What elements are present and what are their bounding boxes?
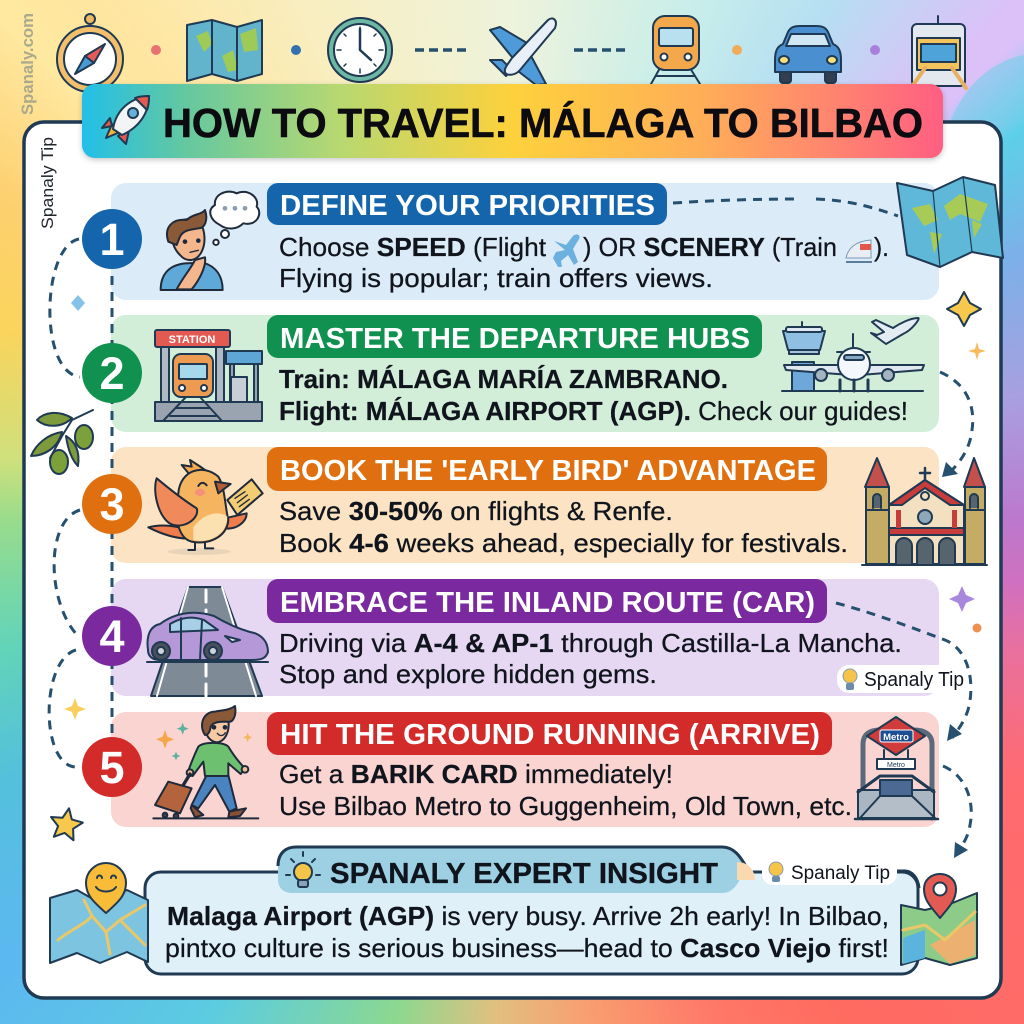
pill heading 4 xyxy=(267,579,827,623)
icon: platform xyxy=(911,16,966,88)
decoration: gold sparkle xyxy=(64,698,86,720)
body text 5: Use Bilbao Metro to Guggenheim, Old Town, etc. xyxy=(279,791,852,821)
icon: station: STATION xyxy=(169,334,215,346)
decoration: diamond sparkle xyxy=(71,295,85,311)
tab outline xyxy=(278,847,747,868)
connector lines near tip xyxy=(755,871,919,888)
icon: walking traveller xyxy=(153,706,258,818)
step 3 panel xyxy=(111,447,987,565)
background blob xyxy=(950,55,1024,122)
body text 3: Save 30-50% on flights & Renfe. xyxy=(279,496,673,526)
tip badge in insight xyxy=(762,860,897,885)
watermark: Spanaly.com: Spanaly.com xyxy=(18,13,37,115)
peach blob connector xyxy=(737,862,755,880)
step number circles xyxy=(82,209,142,797)
pill heading 5 xyxy=(267,712,832,755)
icon: world map xyxy=(187,20,262,81)
icon: station xyxy=(155,330,262,421)
icon: airplane xyxy=(490,18,556,85)
pill heading 2 xyxy=(267,315,762,358)
decoration: gold star sparkle xyxy=(947,292,981,326)
decoration: small orange sparkle xyxy=(968,342,986,360)
top icon strip xyxy=(57,14,966,92)
icon: rocket xyxy=(102,96,149,144)
title text: HOW TO TRAVEL: MÁLAGA TO BILBAO xyxy=(163,100,923,146)
arrowhead into insight xyxy=(954,842,968,858)
icon: car xyxy=(775,26,841,83)
pill heading 2: MASTER THE DEPARTURE HUBS xyxy=(280,323,750,355)
number 4: 4 xyxy=(99,611,125,662)
title banner xyxy=(82,84,943,158)
insight text xyxy=(165,901,889,963)
number 3: 3 xyxy=(99,479,125,530)
body text 1: ). xyxy=(874,232,889,262)
icon: airport and planes xyxy=(782,318,924,391)
tip label: Spanaly Tip xyxy=(791,863,890,884)
body text 5 xyxy=(279,759,852,821)
tip label: Spanaly Tip xyxy=(864,669,964,691)
icon: metro entrance: Metro xyxy=(887,762,905,769)
number 2: 2 xyxy=(99,348,125,399)
icon: bird with ticket xyxy=(148,460,263,555)
tip badge in step 4 xyxy=(837,665,968,693)
number 5: 5 xyxy=(99,742,125,793)
body text 1: Choose SPEED (Flight xyxy=(279,232,547,262)
decoration: gold star xyxy=(51,808,83,840)
icon: road and car xyxy=(147,587,268,696)
step 5 panel xyxy=(111,706,939,827)
icon: clock xyxy=(328,18,392,82)
body text 3: Book 4-6 weeks ahead, especially for festivals. xyxy=(279,528,848,558)
icon: bulb xyxy=(843,669,857,690)
body text 4: Stop and explore hidden gems. xyxy=(279,659,657,689)
step 1 panel xyxy=(111,177,1003,300)
inline icon: train xyxy=(846,240,872,262)
icon: thinking person xyxy=(161,192,259,290)
icon: folded map xyxy=(897,177,1003,267)
step 2 panel xyxy=(111,315,939,432)
body text 1 xyxy=(279,232,889,293)
number 5 xyxy=(82,737,142,797)
body text 2: Train: MÁLAGA MARÍA ZAMBRANO. xyxy=(279,364,728,394)
tab xyxy=(278,847,745,893)
flow dashed lines xyxy=(49,199,973,850)
arrowhead into metro xyxy=(947,724,962,741)
inline icon: plane xyxy=(553,235,580,267)
body text 5: Get a BARIK CARD immediately! xyxy=(279,759,673,789)
pill heading 5: HIT THE GROUND RUNNING (ARRIVE) xyxy=(280,719,820,751)
watermark: Spanaly Tip rotated: Spanaly Tip xyxy=(38,137,57,229)
body text 1: ) OR SCENERY (Train xyxy=(583,232,837,262)
pill heading 4: EMBRACE THE INLAND ROUTE (CAR) xyxy=(280,587,815,619)
dot purple xyxy=(870,45,880,55)
number 2 xyxy=(82,343,142,403)
icon: cathedral xyxy=(862,458,987,565)
insight heading: SPANALY EXPERT INSIGHT xyxy=(330,858,718,890)
dashes left of plane xyxy=(415,48,470,52)
number 1: 1 xyxy=(99,214,125,265)
icon: map with smiley pin xyxy=(50,863,148,963)
body text 2 xyxy=(279,364,908,426)
icon: compass xyxy=(57,14,123,92)
body text 2: Flight: MÁLAGA AIRPORT (AGP). Check our guides! xyxy=(279,396,908,426)
decoration: purple sparkle xyxy=(949,586,975,612)
number 4 xyxy=(82,606,142,666)
icon: train xyxy=(651,16,700,84)
dashes right of plane xyxy=(574,48,630,52)
insight text: pintxo culture is serious business—head to Casco Viejo first! xyxy=(165,933,889,963)
icon: metro entrance: Metro xyxy=(883,732,909,743)
body text 3 xyxy=(279,496,848,558)
number 1 xyxy=(82,209,142,269)
body text 4: Driving via A-4 & AP-1 through Castilla-La Mancha. xyxy=(279,628,902,658)
expert insight box xyxy=(145,847,918,974)
dot orange xyxy=(732,45,742,55)
decoration: orange dot xyxy=(972,624,982,632)
decoration: olive branch xyxy=(31,410,93,474)
step 4 panel xyxy=(111,579,939,696)
dot red xyxy=(151,45,161,55)
arrowhead into cathedral xyxy=(942,462,958,477)
pill heading 3 xyxy=(267,447,827,491)
dot blue xyxy=(291,45,301,55)
insight heading icon: bulb xyxy=(286,852,320,887)
icon: metro entrance xyxy=(855,717,938,819)
body text 1: Flying is popular; train offers views. xyxy=(279,263,713,293)
pill heading 3: BOOK THE 'EARLY BIRD' ADVANTAGE xyxy=(280,455,816,487)
icon: map with red pin xyxy=(901,874,977,965)
body text 4 xyxy=(279,628,902,689)
icon: bulb small xyxy=(769,862,783,882)
pill heading 1: DEFINE YOUR PRIORITIES xyxy=(280,190,655,222)
insight text: Malaga Airport (AGP) is very busy. Arrive 2h early! In Bilbao, xyxy=(167,901,889,931)
number 3 xyxy=(82,474,142,534)
